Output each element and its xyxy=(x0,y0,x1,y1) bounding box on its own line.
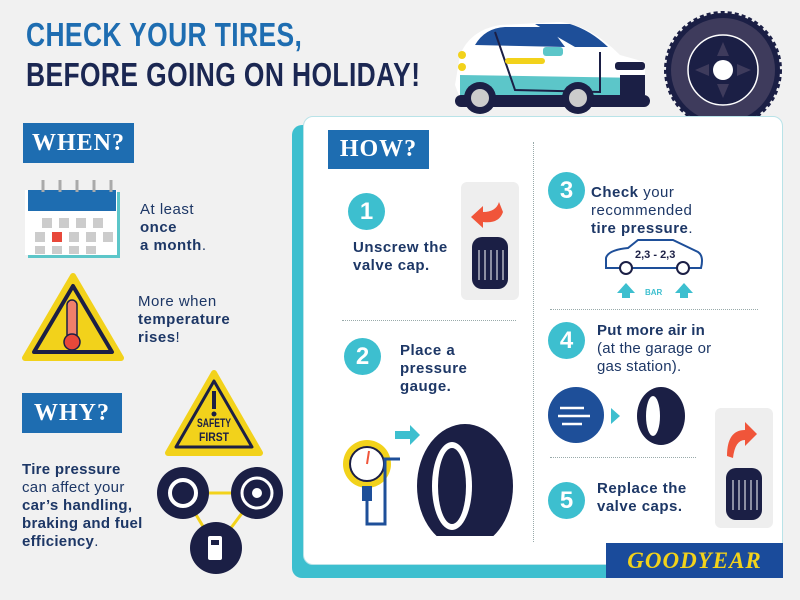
step 2 xyxy=(343,338,513,536)
heading: how xyxy=(328,130,429,169)
heading: when: WHEN? xyxy=(32,130,125,156)
icon: car pressure: 2,3 - 2,3 xyxy=(635,249,675,261)
icon: gauge and tire xyxy=(343,424,513,536)
text: once a month xyxy=(140,201,207,254)
step 2: 2 xyxy=(356,343,369,370)
icon: temperature warning xyxy=(22,273,124,361)
text: why: car’s handling, xyxy=(22,497,132,514)
text: why: braking and fuel xyxy=(22,515,143,532)
heading: how: HOW? xyxy=(340,136,417,162)
title xyxy=(26,16,420,93)
step 4 xyxy=(548,322,711,445)
step 2: Place a xyxy=(400,342,455,359)
step 3: recommended xyxy=(591,202,692,219)
step 5: Replace the xyxy=(597,480,687,497)
text: temperature: temperature xyxy=(138,311,230,328)
logo: goodyear: GOODYEAR xyxy=(627,548,762,573)
step 3: tire pressure. xyxy=(591,220,693,237)
step 4: Put more air in xyxy=(597,322,705,339)
text: temperature: rises! xyxy=(138,329,180,346)
text: once a month: a month. xyxy=(140,237,207,254)
step 1: valve cap. xyxy=(353,257,430,274)
logo: goodyear xyxy=(606,543,783,578)
step 4: 4 xyxy=(560,327,573,354)
step 5 xyxy=(548,408,773,528)
heading: why: WHY? xyxy=(34,400,110,426)
heading: when xyxy=(23,123,134,163)
panel: how xyxy=(303,116,783,565)
step 3: 3 xyxy=(560,177,573,204)
icon: air to tire xyxy=(548,387,685,445)
icon: safety first: SAFETY xyxy=(197,416,231,430)
title: BEFORE GOING ON HOLIDAY! xyxy=(26,56,420,93)
text: why: Tire pressure xyxy=(22,461,121,478)
panel: how (teal shadow) xyxy=(292,125,783,578)
heading: why xyxy=(22,393,122,433)
icon: valve cap unscrew xyxy=(461,182,519,300)
step 1 xyxy=(348,182,519,300)
step 1: 1 xyxy=(360,198,373,225)
step 3 xyxy=(548,172,703,298)
text: why: efficiency. xyxy=(22,533,99,550)
step 3: Check your xyxy=(591,184,674,201)
title: CHECK YOUR TIRES, xyxy=(26,16,302,53)
step 4: (at the garage or xyxy=(597,340,711,357)
text: why xyxy=(22,461,143,550)
text: once a month: once xyxy=(140,219,177,236)
step 2: pressure xyxy=(400,360,467,377)
icons: handling braking fuel xyxy=(157,467,283,574)
text: temperature xyxy=(138,293,230,346)
text: why: can affect your xyxy=(22,479,125,496)
icon: safety first: FIRST xyxy=(199,430,230,444)
icon: valve cap replace xyxy=(715,408,773,528)
step 1: Unscrew the xyxy=(353,239,448,256)
step 2: gauge. xyxy=(400,378,451,395)
step 5: 5 xyxy=(560,487,573,514)
step 4: gas station). xyxy=(597,358,681,375)
text: once a month: At least xyxy=(140,201,194,218)
illustration: car and tire xyxy=(455,11,782,116)
icon: car pressure: BAR xyxy=(645,288,663,297)
icon: calendar xyxy=(25,180,120,258)
text: temperature: More when xyxy=(138,293,217,310)
icon: safety first xyxy=(165,370,263,456)
icon: car pressure xyxy=(605,239,703,298)
step 5: valve caps. xyxy=(597,498,683,515)
